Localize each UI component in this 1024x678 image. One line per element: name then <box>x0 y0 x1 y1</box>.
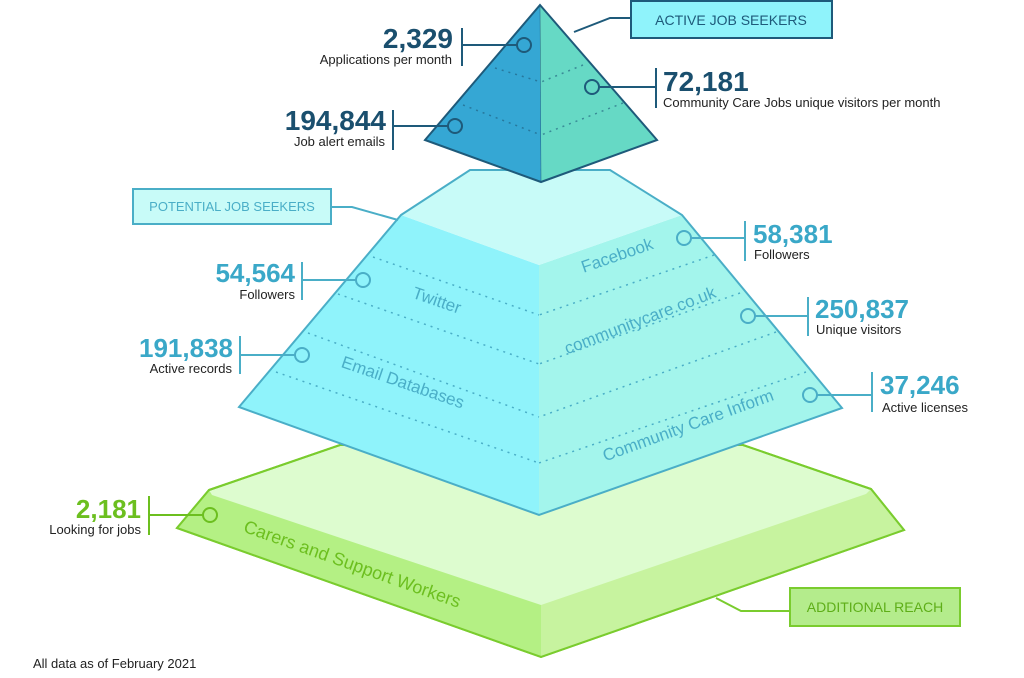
stat: 58,381 Facebook: 58,381 <box>753 219 833 249</box>
stat: 72,181 unique visitors <box>663 66 940 110</box>
face labels: Email Databases <box>339 353 467 412</box>
stat: 54,564 Twitter <box>215 258 296 302</box>
box: POTENTIAL JOB SEEKERS <box>133 189 398 224</box>
callouts: potential job seekers stats <box>240 221 872 412</box>
box: POTENTIAL JOB SEEKERS: POTENTIAL JOB SEEKERS <box>149 199 315 214</box>
stat: 58,381 Facebook: Followers <box>754 247 810 262</box>
stat: 37,246 licenses: Active licenses <box>882 400 968 415</box>
middle pyramid: potential job seekers <box>239 170 842 515</box>
label: Carers and Support Workers: Carers and Support Workers <box>241 516 463 612</box>
stat: 2,329 applications <box>320 23 453 67</box>
stat: 2,181 carers: Looking for jobs <box>49 522 141 537</box>
stat: 191,838 email: 191,838 <box>139 333 233 363</box>
base layer: additional reach <box>177 445 904 657</box>
stat: 250,837 website <box>815 294 909 337</box>
stat: 54,564 Twitter: Followers <box>239 287 295 302</box>
stat: 2,329 applications: 2,329 <box>383 23 453 54</box>
face labels: Facebook <box>579 234 656 277</box>
stat: 250,837 website: Unique visitors <box>816 322 902 337</box>
stat: 2,329 applications: Applications per month <box>320 52 452 67</box>
footer note: All data as of February 2021 <box>33 656 196 671</box>
box: ACTIVE JOB SEEKERS: ACTIVE JOB SEEKERS <box>655 12 807 28</box>
face labels: Community Care Inform <box>600 386 776 465</box>
face labels <box>339 234 776 465</box>
box: ADDITIONAL REACH: ADDITIONAL REACH <box>807 599 943 615</box>
stat: 72,181 unique visitors: 72,181 <box>663 66 749 97</box>
box: ADDITIONAL REACH <box>716 588 960 626</box>
stat: 37,246 licenses <box>880 370 968 415</box>
face labels: communitycare.co.uk <box>562 283 719 358</box>
stat: 191,838 email <box>139 333 233 376</box>
stat: 54,564 Twitter: 54,564 <box>215 258 296 288</box>
stat: 191,838 email: Active records <box>150 361 232 376</box>
stat: 194,844 job alert emails: Job alert emails <box>294 134 385 149</box>
top pyramid: active job seekers <box>425 5 657 182</box>
stat: 2,181 carers: 2,181 <box>76 494 141 524</box>
stat: 194,844 job alert emails: 194,844 <box>285 105 386 136</box>
stat: 37,246 licenses: 37,246 <box>880 370 960 400</box>
stat: 250,837 website: 250,837 <box>815 294 909 324</box>
stat: 2,181 carers <box>49 494 217 537</box>
callouts: active job seekers stats <box>393 18 656 150</box>
stat: 58,381 Facebook <box>753 219 833 262</box>
face labels: Twitter <box>410 283 464 318</box>
stat: 72,181 unique visitors: Community Care Jobs unique visitors per month <box>663 95 940 110</box>
box: ACTIVE JOB SEEKERS <box>631 1 832 38</box>
